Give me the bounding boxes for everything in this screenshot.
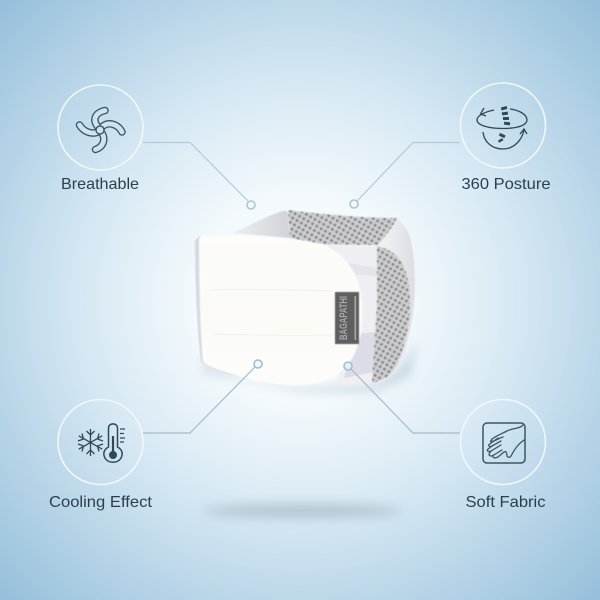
label: 360 Posture [462, 176, 551, 193]
feature: 360 posture [460, 83, 551, 193]
outer right band [376, 218, 415, 383]
connector: soft fabric [344, 362, 460, 433]
badge circle [460, 400, 546, 484]
brand label [335, 292, 359, 344]
feature: soft fabric [460, 400, 546, 511]
icon: hand on fabric [483, 423, 525, 463]
feature: breathable [58, 85, 143, 193]
left folded edge [195, 236, 240, 376]
product: cooling belt [195, 210, 418, 392]
flap seam [210, 290, 333, 291]
badge circle [460, 83, 546, 168]
label: Breathable [61, 176, 139, 193]
badge circle [58, 85, 143, 170]
label: Cooling Effect [49, 494, 153, 511]
label: Soft Fabric [466, 494, 546, 511]
badge circle [58, 400, 143, 484]
feature: cooling effect [49, 400, 153, 511]
icon: rotating spine [477, 106, 527, 149]
icon: fan [80, 110, 122, 150]
side mesh panel [372, 246, 410, 383]
brand label: BAGAPATHI [338, 296, 350, 340]
back inner band [232, 211, 290, 238]
product soft shadow [200, 340, 418, 392]
white front flap [199, 236, 363, 385]
connector: cooling effect [143, 360, 262, 433]
connector: breathable [143, 142, 255, 209]
back mesh panel [288, 210, 397, 245]
strap under flap [326, 244, 378, 386]
icon: snowflake [78, 429, 103, 456]
connector: 360 posture [350, 142, 460, 208]
icon: thermometer [104, 424, 125, 462]
floor shadow [202, 506, 402, 516]
